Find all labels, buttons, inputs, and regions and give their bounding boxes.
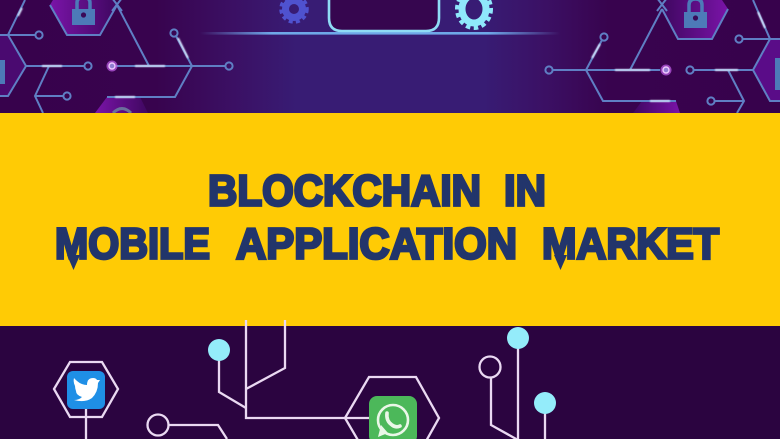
cyan node one — [208, 339, 230, 361]
cyan node three — [534, 392, 556, 414]
title line one: BLOCKCHAIN — [208, 166, 481, 216]
circuit: left lines — [0, 0, 233, 113]
icon: far right lock — [753, 39, 780, 101]
panel: top circuit banner — [0, 0, 780, 113]
circuit: left highlights — [18, 8, 188, 97]
title line two: APPLICATION — [236, 220, 517, 268]
icon: whatsapp hexagon — [345, 377, 439, 439]
icon: right magenta node — [660, 64, 672, 76]
open node right — [480, 356, 500, 378]
icon: phone bottom — [329, 0, 439, 31]
icon: lower left hexagon — [95, 97, 148, 113]
circuit: right highlights — [592, 12, 765, 101]
title line two: MARKET — [542, 220, 719, 268]
circuit: right lines — [545, 0, 780, 113]
icon: left lock hexagon — [50, 0, 117, 35]
panel: bottom network — [0, 320, 780, 439]
icon: right lock hexagon — [662, 0, 728, 39]
panel: yellow title band — [0, 113, 780, 326]
open node left — [148, 414, 168, 436]
icon: lower right hexagon — [633, 101, 680, 113]
icon: large cyan gear — [457, 0, 491, 28]
icon: far left lock — [0, 35, 26, 96]
icon: small blue gear — [281, 0, 307, 22]
icon: left magenta node — [106, 60, 118, 72]
title — [55, 166, 719, 270]
title line two: MOBILE — [55, 220, 210, 268]
icon: twitter hexagon — [54, 362, 118, 417]
title line one: IN — [504, 166, 546, 216]
network lines — [86, 320, 545, 439]
cyan node two — [507, 327, 529, 349]
divider glow line — [200, 32, 560, 35]
title line two — [55, 220, 719, 268]
letter spikes — [67, 255, 567, 270]
